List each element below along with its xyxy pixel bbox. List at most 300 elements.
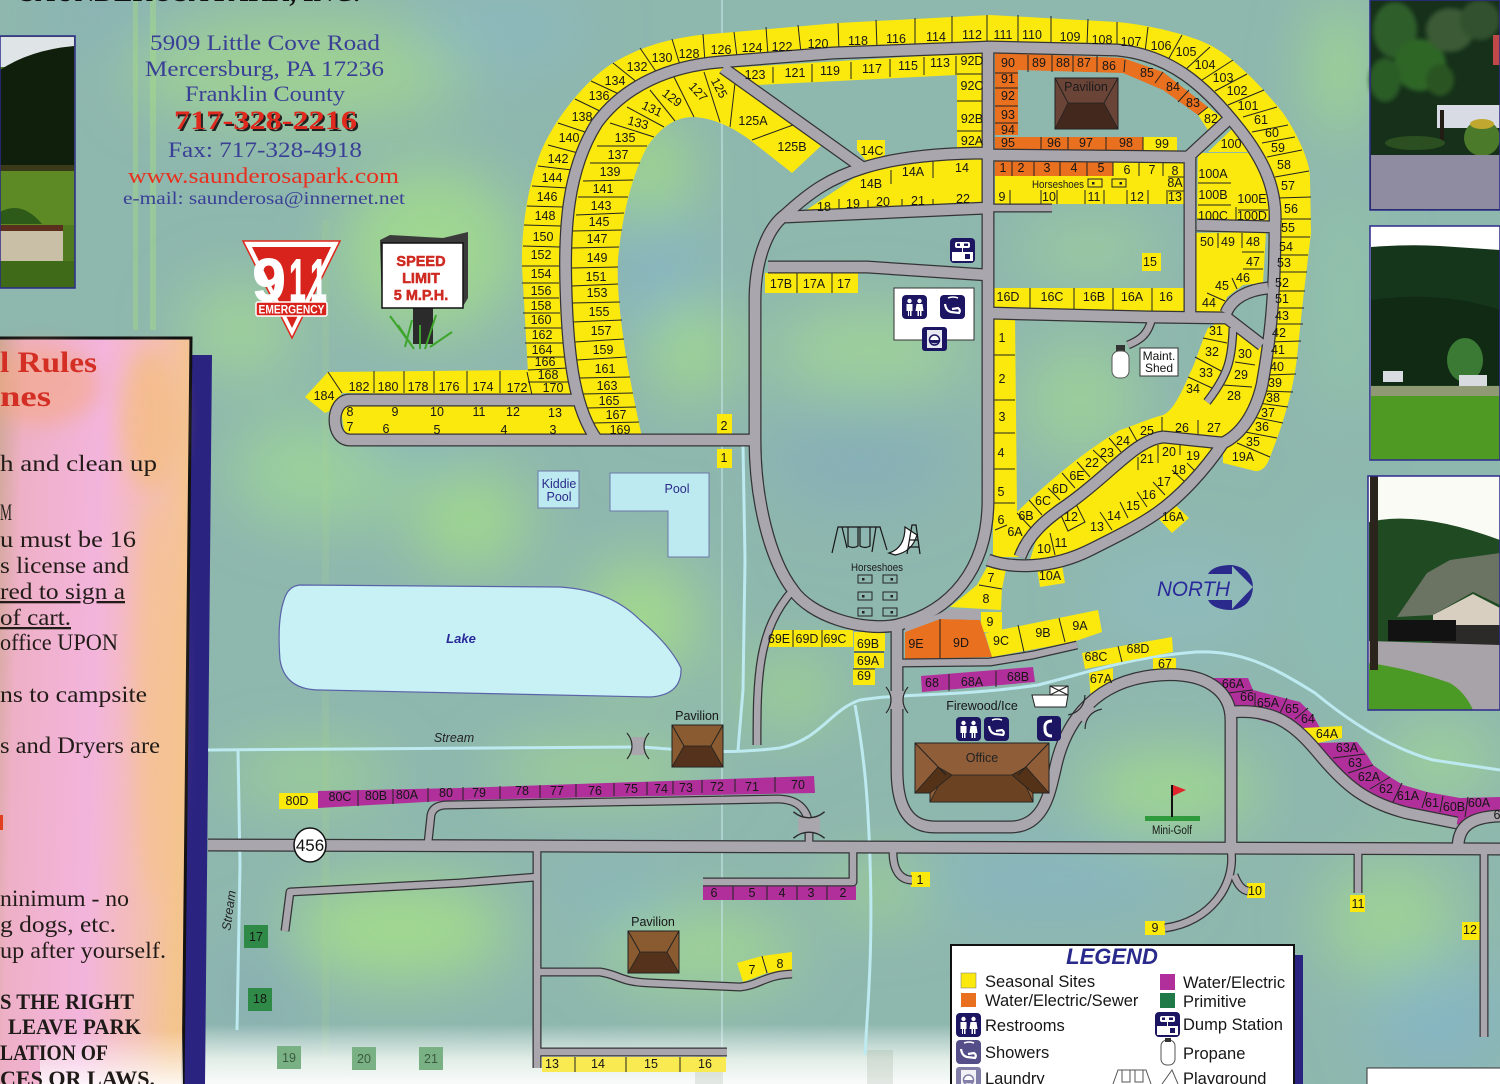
site numbers: 44	[1202, 296, 1216, 310]
legend panel: Showers	[985, 1044, 1049, 1062]
site numbers: 15	[644, 1057, 658, 1071]
site numbers: 17B	[770, 277, 792, 291]
site numbers: 152	[531, 248, 551, 262]
site numbers: 89	[1032, 56, 1046, 70]
site numbers: 1	[917, 873, 924, 887]
site numbers: 103	[1213, 71, 1233, 85]
site numbers: 77	[550, 784, 564, 798]
water/electric sites: purple areas	[318, 667, 1500, 900]
site numbers: 9C	[993, 634, 1009, 648]
site numbers: 122	[772, 40, 792, 54]
site numbers: 45	[1215, 279, 1229, 293]
park address and contact block: 5909 Little Cove Road	[150, 30, 380, 55]
park address and contact block: Mercersburg, PA 17236	[145, 56, 384, 81]
legend panel: Restrooms	[985, 1017, 1065, 1035]
site numbers: 30	[1238, 347, 1252, 361]
pool	[610, 473, 709, 557]
site numbers: 130	[652, 51, 672, 65]
bridge: office drive east	[1068, 695, 1102, 729]
pavilion: upper: Pavilion	[1064, 80, 1108, 94]
site numbers: 161	[595, 362, 615, 376]
site numbers: 80C	[329, 790, 351, 804]
site numbers: 68A	[961, 675, 984, 689]
site numbers: 98	[1119, 136, 1133, 150]
site numbers: 60B	[1443, 800, 1465, 814]
site numbers: 28	[1227, 389, 1241, 403]
site numbers: 52	[1275, 276, 1289, 290]
panel: park rules and guidelines: l Rules	[0, 346, 97, 379]
site numbers: 141	[593, 182, 613, 196]
site numbers: 151	[586, 270, 606, 284]
site numbers: 126	[711, 43, 731, 57]
site numbers: 16	[1142, 488, 1156, 502]
panel: park rules and guidelines: s license and	[0, 553, 130, 578]
site numbers: 20	[357, 1052, 371, 1066]
site numbers: 10	[430, 405, 444, 419]
panel: park rules and guidelines: of cart.	[0, 605, 71, 630]
site numbers: 22	[956, 192, 970, 206]
site numbers: 129	[659, 86, 685, 110]
site numbers: 25	[1140, 424, 1154, 438]
site numbers: 69E	[768, 632, 790, 646]
site numbers: 100C	[1198, 209, 1228, 223]
site numbers: 9	[999, 190, 1006, 204]
site numbers: 65	[1285, 702, 1299, 716]
panel: park rules and guidelines: M	[0, 500, 12, 525]
icon: telephone	[1037, 716, 1061, 741]
site numbers: 144	[542, 171, 562, 185]
site numbers: 78	[515, 784, 529, 798]
park address and contact block: www.saunderosapark.com	[128, 163, 399, 188]
site numbers: 13	[1168, 190, 1182, 204]
bridge: lower road	[793, 812, 825, 838]
site numbers: 104	[1195, 58, 1215, 72]
site numbers: 59	[1271, 141, 1285, 155]
yellow site 64A	[1303, 726, 1342, 743]
site numbers: 39	[1268, 376, 1282, 390]
panel: park rules and guidelines: S THE RIGHT	[0, 989, 134, 1014]
site numbers: 10	[1042, 190, 1056, 204]
white amenity box: restrooms, showers, laundry	[894, 288, 974, 351]
site numbers: 125B	[777, 140, 807, 154]
kiddie pool label: Kiddie	[542, 477, 576, 491]
site numbers: 5	[749, 886, 756, 900]
site numbers: 61	[1425, 796, 1439, 810]
site numbers: 178	[408, 380, 428, 394]
site numbers: 49	[1221, 235, 1235, 249]
site numbers: 101	[1238, 99, 1258, 113]
site numbers: 87	[1077, 56, 1091, 70]
site numbers: 100E	[1237, 192, 1267, 206]
site numbers: 18	[817, 200, 831, 214]
site numbers: 15	[1126, 499, 1140, 513]
site numbers: 46	[1236, 271, 1250, 285]
site numbers: 31	[1209, 324, 1223, 338]
site numbers: 80D	[286, 794, 308, 808]
site numbers: 9D	[953, 636, 969, 650]
site numbers: 14	[955, 161, 969, 175]
site numbers: 6	[998, 513, 1005, 527]
site numbers: 121	[785, 66, 805, 80]
site numbers: 9	[987, 615, 994, 629]
site numbers: 68D	[1127, 642, 1149, 656]
site numbers: 17A	[803, 277, 826, 291]
panel: park rules and guidelines: office UPON	[0, 630, 118, 655]
site numbers: 11	[1055, 536, 1068, 550]
site numbers: 16	[698, 1057, 712, 1071]
site numbers: 69A	[857, 654, 880, 668]
site numbers: 5	[998, 485, 1005, 499]
site numbers: 62A	[1358, 770, 1381, 784]
site numbers: 174	[473, 380, 493, 394]
site numbers: 150	[533, 230, 553, 244]
site numbers: 6A	[1007, 525, 1023, 539]
site numbers: 11	[473, 405, 486, 419]
site numbers: 27	[1207, 421, 1221, 435]
site numbers: 55	[1281, 221, 1295, 235]
site numbers: 100	[1221, 137, 1241, 151]
icon: speed limit sign: LIMIT	[402, 271, 440, 287]
site numbers: 124	[742, 41, 762, 55]
site numbers: 86	[1102, 59, 1116, 73]
site numbers: 65A	[1257, 696, 1280, 710]
site numbers: 99	[1155, 137, 1169, 151]
office building: Office	[966, 751, 998, 765]
site numbers: 38	[1266, 391, 1280, 405]
site numbers: 153	[587, 286, 607, 300]
site numbers: 80	[439, 786, 453, 800]
site numbers: 71	[745, 780, 759, 794]
site numbers: 97	[1079, 136, 1093, 150]
site numbers: 23	[1100, 446, 1114, 460]
site numbers: 1	[999, 331, 1006, 345]
icon: 911 emergency sign	[243, 241, 340, 338]
kiddie pool	[538, 471, 579, 508]
panel: park rules and guidelines: red to sign a	[0, 579, 125, 604]
maintenance shed box: Shed	[1145, 361, 1173, 375]
site numbers: 18	[253, 992, 267, 1006]
site numbers: 148	[535, 209, 555, 223]
site numbers: 9E	[908, 637, 924, 651]
site numbers: 109	[1060, 30, 1080, 44]
park address and contact block: 717-328-2216	[176, 108, 359, 137]
site numbers: 182	[349, 380, 369, 394]
site numbers: 149	[587, 251, 607, 265]
icon: 911 emergency sign: 9	[252, 247, 286, 314]
site numbers: 143	[591, 199, 611, 213]
site numbers: 11	[1352, 897, 1365, 911]
pavilion: middle	[672, 709, 723, 767]
photo: left entrance	[0, 36, 75, 288]
site numbers: 155	[589, 305, 609, 319]
site numbers: 13	[548, 406, 562, 420]
panel: park rules and guidelines: up after yourself.	[0, 938, 166, 963]
icon: firewood stand	[1032, 686, 1068, 707]
legend panel: Water/Electric/Sewer	[985, 992, 1139, 1010]
site numbers: 83	[1186, 96, 1200, 110]
site numbers: 159	[593, 343, 613, 357]
site numbers: 40	[1270, 360, 1284, 374]
site numbers: 95	[1001, 136, 1015, 150]
horseshoe pits in site block	[1032, 179, 1126, 191]
site numbers: 66	[1240, 690, 1254, 704]
maintenance shed box: Maint.	[1143, 349, 1175, 363]
icon: 911 emergency sign: EMERGENCY	[258, 304, 325, 316]
site numbers: 69B	[857, 637, 879, 651]
water/electric/sewer sites: orange areas	[905, 53, 1208, 659]
site numbers: 164	[532, 343, 552, 357]
site numbers: 4	[998, 446, 1005, 460]
site numbers: 92A	[961, 134, 984, 148]
site numbers: 12	[1130, 190, 1144, 204]
site numbers: 26	[1175, 421, 1189, 435]
site numbers: 43	[1275, 309, 1289, 323]
site numbers: 73	[679, 781, 693, 795]
site numbers: 160	[531, 313, 551, 327]
park address and contact block: Franklin County	[185, 81, 345, 106]
legend panel: LEGEND	[1066, 944, 1158, 969]
icon: dump station	[950, 238, 975, 263]
site numbers: 120	[808, 37, 828, 51]
site numbers: 70	[791, 778, 805, 792]
icon: 911 emergency sign: 1	[310, 248, 327, 315]
panel: park rules and guidelines: ninimum - no	[0, 886, 129, 911]
site numbers: 4	[779, 886, 786, 900]
site numbers: 16	[1159, 290, 1173, 304]
icon: speed limit sign: 5 M.P.H.	[394, 288, 448, 304]
site numbers: 6D	[1052, 482, 1068, 496]
site numbers: 12	[1463, 923, 1477, 937]
site numbers: 5	[1098, 161, 1105, 175]
site numbers: 138	[572, 110, 592, 124]
site numbers: 12	[506, 405, 520, 419]
site numbers: 165	[599, 394, 619, 408]
site numbers: 10A	[1039, 569, 1062, 583]
lake label: Lake	[446, 631, 476, 646]
site numbers: 92	[1001, 89, 1015, 103]
site numbers: 92C	[961, 79, 983, 93]
site numbers: 20	[876, 195, 890, 209]
site numbers: 37	[1261, 406, 1275, 420]
site numbers: 118	[848, 34, 868, 48]
site numbers: 142	[548, 152, 568, 166]
site numbers: 2	[1018, 161, 1025, 175]
site numbers: 12	[1064, 510, 1078, 524]
site numbers: 13	[1090, 520, 1104, 534]
site numbers: 34	[1186, 382, 1200, 396]
site numbers: 61A	[1397, 789, 1420, 803]
site numbers: 2	[721, 419, 728, 433]
site numbers: 21	[1140, 452, 1154, 466]
site numbers: 184	[314, 389, 334, 403]
icon: speed limit sign: SPEED	[396, 254, 446, 270]
site numbers: 29	[1234, 368, 1248, 382]
site numbers: 6	[711, 886, 718, 900]
site numbers: 10	[1248, 884, 1262, 898]
gray parking pad beside 9E	[905, 609, 980, 632]
legend panel: Dump Station	[1183, 1016, 1283, 1034]
north arrow	[1157, 565, 1253, 610]
site numbers: 172	[507, 381, 527, 395]
legend panel: Water/Electric	[1183, 974, 1285, 992]
site numbers: 9	[392, 405, 399, 419]
site numbers: 4	[1071, 161, 1078, 175]
park address and contact block: e-mail: saunderosa@innernet.net	[123, 188, 405, 208]
site numbers: 7	[988, 571, 995, 585]
office building	[915, 743, 1049, 802]
panel: park rules and guidelines	[0, 338, 191, 1084]
site numbers: 7	[749, 963, 756, 977]
pale bottom fade	[205, 1024, 1105, 1084]
site numbers: 10	[1037, 542, 1051, 556]
site numbers: 19	[1186, 449, 1200, 463]
panel: park rules and guidelines: LEAVE PARK	[8, 1014, 141, 1039]
site numbers: 100D	[1237, 209, 1267, 223]
legend panel: Propane	[1183, 1045, 1245, 1063]
maintenance shed box	[1140, 348, 1178, 376]
site numbers: 80B	[365, 789, 387, 803]
site numbers: 84	[1166, 80, 1180, 94]
panel: park rules and guidelines: nes	[0, 380, 51, 413]
site numbers: 9B	[1035, 626, 1051, 640]
site numbers: 16A	[1121, 290, 1144, 304]
site numbers: 9	[1152, 921, 1159, 935]
site numbers: 132	[627, 60, 647, 74]
site numbers: 21	[911, 194, 925, 208]
site numbers: 69D	[796, 632, 818, 646]
site numbers: 113	[930, 56, 950, 70]
site numbers: 154	[531, 267, 551, 281]
icon: speed limit sign	[380, 232, 468, 349]
site numbers: 6B	[1018, 509, 1034, 523]
horseshoe pits near playground	[851, 562, 903, 616]
site numbers: 21	[424, 1052, 438, 1066]
panel: park rules and guidelines: g dogs, etc.	[0, 912, 116, 937]
site numbers: 96	[1047, 136, 1061, 150]
site numbers: 128	[679, 47, 699, 61]
site numbers: 67	[1158, 657, 1172, 671]
site numbers: 93	[1001, 108, 1015, 122]
site numbers: 92D	[961, 54, 983, 68]
pavilion: lower: Pavilion	[631, 915, 675, 929]
site numbers: 5	[434, 423, 441, 437]
site numbers: 79	[472, 786, 486, 800]
site numbers: 133	[626, 114, 650, 132]
icon: mini-golf flag	[1145, 785, 1200, 837]
icon: propane tank	[1112, 345, 1129, 378]
site numbers: 180	[378, 380, 398, 394]
site numbers: 157	[591, 324, 611, 338]
site numbers: 3	[808, 886, 815, 900]
site dividers	[328, 15, 1468, 1072]
site numbers: 7	[1149, 163, 1156, 177]
site numbers: 69	[857, 669, 871, 683]
panel: park rules and guidelines: LATION OF	[0, 1040, 108, 1065]
site numbers: 11	[1088, 190, 1101, 204]
site numbers: 50	[1200, 235, 1214, 249]
site numbers: 75	[624, 782, 638, 796]
route 456 badge	[294, 828, 326, 862]
site numbers: 162	[532, 328, 552, 342]
site numbers: 6	[1124, 163, 1131, 177]
site numbers: 17	[837, 277, 851, 291]
legend shadow	[1295, 955, 1303, 1084]
site numbers: 2	[840, 886, 847, 900]
site numbers: 115	[898, 59, 918, 73]
site numbers: 63	[1348, 756, 1362, 770]
site numbers: 6C	[1035, 494, 1051, 508]
primitive sites: green squares	[244, 925, 443, 1070]
site numbers: 19	[282, 1051, 296, 1065]
site numbers: 68B	[1007, 670, 1029, 684]
site numbers: 16B	[1083, 290, 1105, 304]
site numbers: 105	[1176, 45, 1196, 59]
site numbers: 24	[1116, 434, 1130, 448]
site numbers: 9A	[1072, 619, 1088, 633]
site numbers: 62	[1379, 782, 1393, 796]
site numbers: 145	[589, 215, 609, 229]
site numbers: 19	[846, 197, 860, 211]
site numbers: 2	[999, 372, 1006, 386]
legend panel: Seasonal Sites	[985, 973, 1095, 991]
site numbers: 1	[721, 451, 728, 465]
photo: right middle, mountain and field	[1370, 226, 1500, 460]
site numbers: 47	[1246, 255, 1260, 269]
site numbers: 135	[615, 131, 635, 145]
site numbers: 76	[588, 784, 602, 798]
panel: park rules and guidelines: u must be 16	[0, 527, 136, 552]
site numbers: 4	[501, 423, 508, 437]
streams	[208, 445, 1500, 1055]
site numbers: 114	[926, 30, 946, 44]
site numbers: 57	[1281, 179, 1295, 193]
bridge: office drive west	[886, 687, 908, 713]
site numbers: 108	[1092, 33, 1112, 47]
site numbers: 56	[1284, 202, 1298, 216]
site numbers: 170	[543, 381, 563, 395]
site numbers: 32	[1205, 345, 1219, 359]
pavilion: lower	[628, 915, 679, 973]
pool label: Pool	[664, 482, 690, 496]
site numbers: 100B	[1198, 188, 1228, 202]
site numbers: 72	[710, 780, 724, 794]
site numbers: 140	[559, 131, 579, 145]
panel: park rules and guidelines: ns to campsite	[0, 682, 147, 707]
site numbers: 8	[1172, 164, 1179, 178]
bridge: stream crossing near pavilion	[627, 733, 649, 759]
site numbers: 106	[1151, 39, 1171, 53]
site numbers: 19A	[1232, 450, 1255, 464]
fold spine of the brochure	[721, 0, 723, 1084]
site numbers: 15	[1143, 255, 1157, 269]
site numbers: 60A	[1468, 796, 1491, 810]
horseshoe pits near playground: Horseshoes	[851, 562, 903, 574]
kiddie pool label	[542, 477, 576, 504]
stream label vertical: Stream	[219, 890, 239, 931]
site numbers: 14	[591, 1057, 605, 1071]
horseshoe pits in site block: Horseshoes	[1032, 179, 1084, 191]
photo: right top, trees and gravel	[1369, 0, 1500, 210]
site numbers: 14C	[861, 144, 883, 158]
site numbers: 68C	[1085, 650, 1107, 664]
seasonal sites: yellow areas	[279, 15, 1480, 1072]
site numbers: 8A	[1167, 176, 1183, 190]
site numbers: 1	[1000, 161, 1007, 175]
site numbers: 131	[640, 98, 664, 120]
site numbers: 3	[999, 410, 1006, 424]
legend panel: Primitive	[1183, 993, 1246, 1011]
panel: park rules and guidelines: h and clean up	[0, 451, 157, 476]
